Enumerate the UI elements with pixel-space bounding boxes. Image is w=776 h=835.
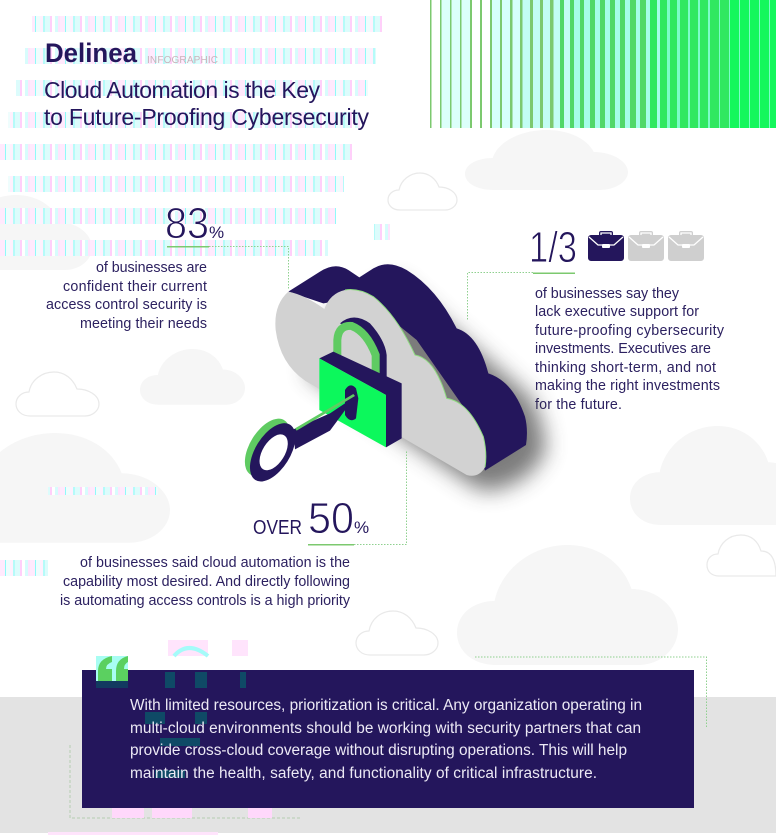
stat: over 50%: 50 — [308, 494, 354, 543]
stat: 1/3: of businesses say they — [535, 286, 680, 302]
bottom grey band — [0, 697, 776, 833]
filled background clouds — [0, 130, 776, 665]
stat: 83%: of businesses are — [96, 260, 207, 276]
padlock shackle — [337, 317, 387, 388]
illustration: cloud with padlock and key — [236, 264, 545, 491]
outlined background clouds — [16, 173, 776, 655]
stat: 83%: % — [209, 223, 224, 242]
cloud face — [275, 290, 486, 476]
title: to Future-Proofing Cybersecurity — [44, 104, 370, 130]
stat: over 50%: OVER — [253, 517, 302, 539]
stat: 83% — [46, 199, 288, 332]
icon: briefcases — [588, 231, 704, 261]
key — [236, 394, 355, 489]
glitch artifacts around quote — [48, 640, 272, 835]
stat: over 50%: of businesses said cloud automation is the — [80, 555, 350, 571]
quote text: maintain the health, safety, and functionality of critical infrastructure. — [130, 765, 597, 782]
title — [44, 77, 370, 130]
logo: Delinea: Delinea — [45, 38, 138, 68]
panel glitch marks — [145, 672, 246, 778]
quote text — [130, 697, 642, 782]
stat: 1/3: thinking short-term, and not — [535, 360, 716, 376]
quote panel — [82, 670, 694, 808]
title: Cloud Automation is the Key — [44, 77, 320, 103]
cloud back — [288, 264, 527, 471]
dotted corner brackets — [70, 657, 706, 818]
stat: 1/3: future-proofing cybersecurity — [535, 323, 725, 339]
stat: 1/3: 1/3 — [529, 223, 577, 272]
top right green stripes — [430, 0, 776, 128]
cloud shadow — [307, 280, 545, 491]
stat: 1/3: for the future. — [535, 397, 622, 413]
stat: 83%: meeting their needs — [80, 316, 207, 332]
quote text: With limited resources, prioritization is critical. Any organization operating in — [130, 697, 642, 714]
icon: quotation marks — [96, 656, 128, 688]
stat: 83%: access control security is — [46, 297, 207, 313]
quote text: provide cross-cloud coverage without disrupting operations. This will help — [130, 742, 627, 759]
quote text: multi-cloud environments should be working with security partners that can — [130, 720, 641, 737]
stat: 1/3: lack executive support for — [535, 304, 699, 320]
stat: 1/3: making the right investments — [535, 378, 720, 394]
glitch stripes behind header — [0, 16, 390, 576]
stat: over 50%: is automating access controls is a high priority — [60, 593, 351, 609]
padlock body — [319, 352, 402, 447]
stat: over 50%: capability most desired. And directly following — [63, 574, 350, 590]
label: INFOGRAPHIC: INFOGRAPHIC — [147, 55, 218, 66]
stat: over 50%: % — [354, 518, 369, 537]
stat: 1/3: investments. Executives are — [535, 341, 711, 357]
stat: 83%: 83 — [165, 199, 209, 248]
stat: 1/3 — [468, 223, 725, 413]
stat: over 50% — [60, 450, 406, 609]
cloud edge highlight — [345, 290, 486, 467]
stat: 83%: confident their current — [63, 279, 207, 295]
